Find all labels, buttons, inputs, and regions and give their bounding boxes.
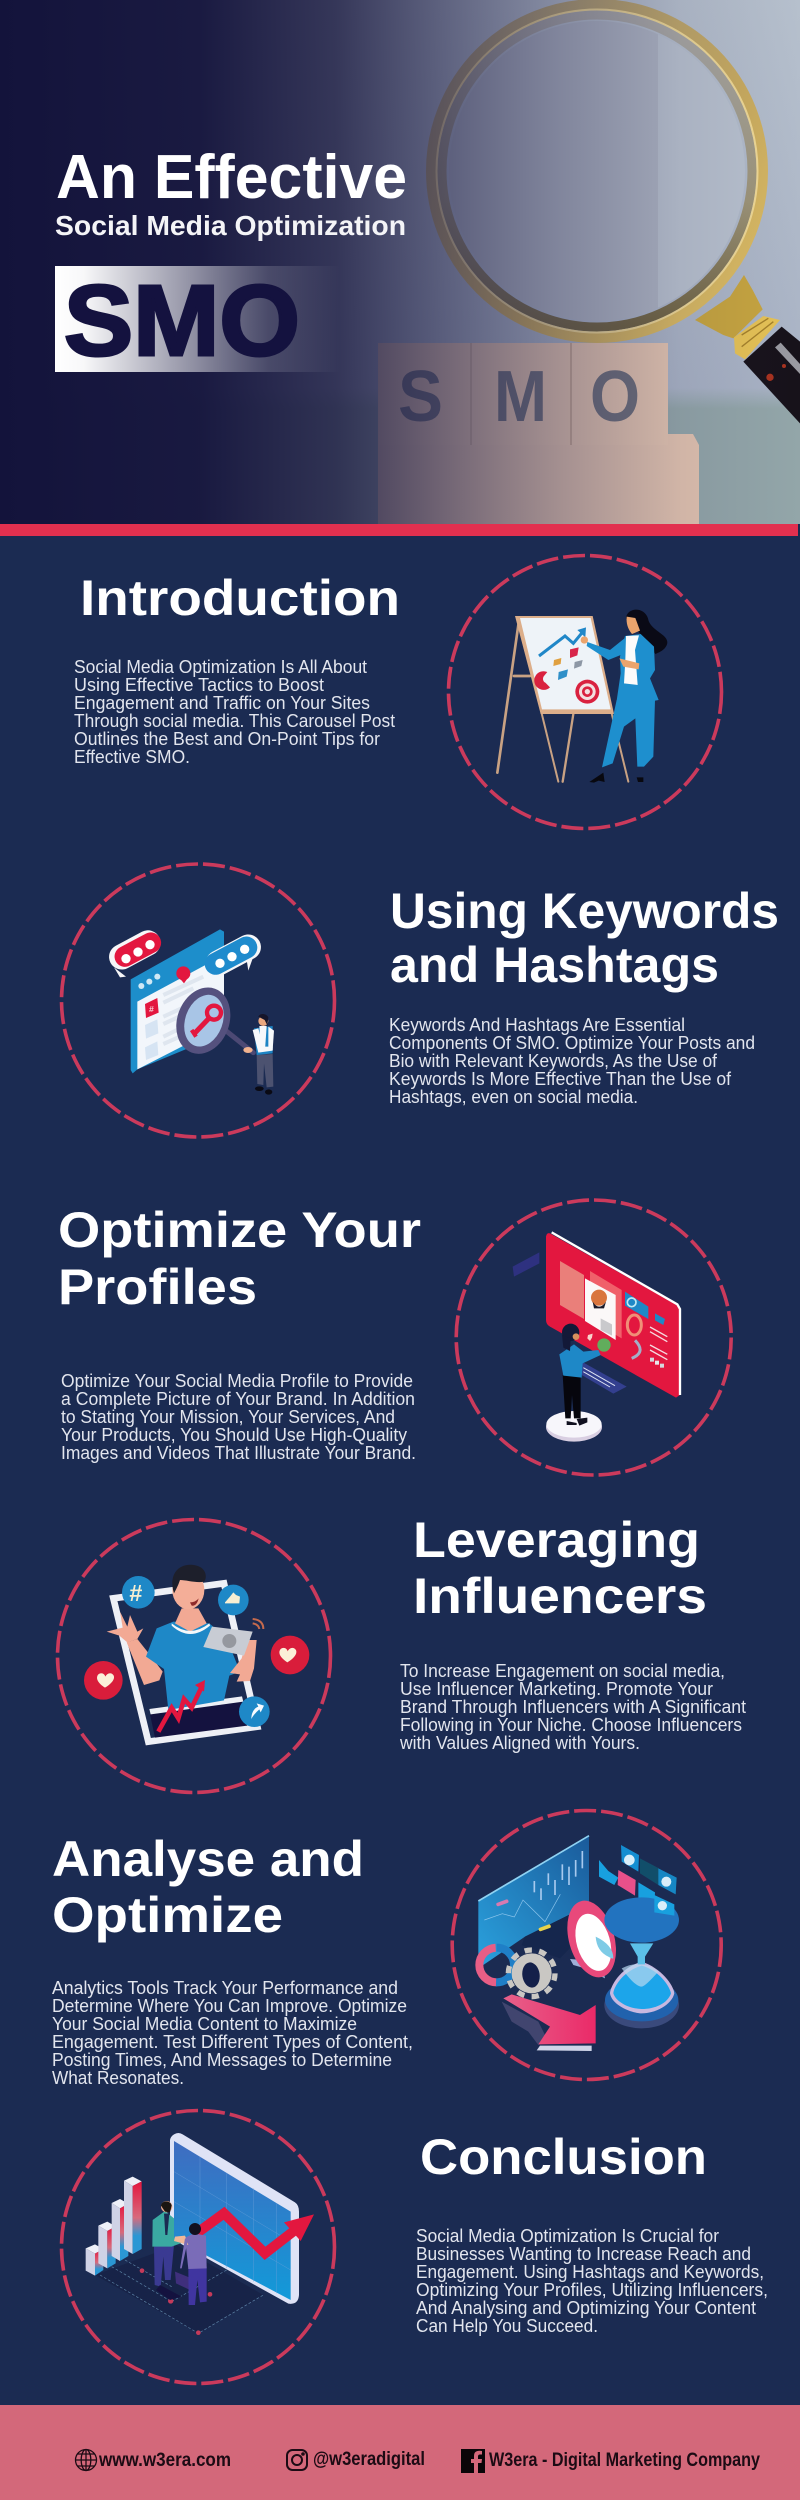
text: conclusion body: Can Help You Succeed.: [416, 2316, 598, 2336]
text: conclusion body: And Analysing and Optimizing Your Content: [416, 2298, 756, 2318]
heading: Optimize Your Profiles: Profiles: [58, 1259, 257, 1315]
heading: Optimize Your Profiles: Optimize Your: [58, 1202, 421, 1258]
panel: optimize your profiles: [58, 1200, 731, 1475]
panel: leveraging influencers: [58, 1512, 746, 1792]
text: introduction body: Through social media. This Carousel Post: [74, 711, 395, 731]
hero photo: magnifier over SMO wooden blocks: S: [398, 357, 443, 437]
text: introduction body: Social Media Optimization Is All About: [74, 657, 367, 677]
title: An Effective: An Effective: [56, 143, 407, 212]
text: influencers body: [399, 1661, 746, 1753]
heading: Analyse and Optimize: Analyse and: [52, 1831, 364, 1887]
panel: conclusion: [62, 2110, 768, 2384]
text: profiles body: Your Products, You Should Use High-Quality: [61, 1425, 407, 1445]
hero banner: [0, 0, 800, 524]
text: introduction body: Using Effective Tactics to Boost: [74, 675, 324, 695]
illustration: dashed circle with influencer in frame: [58, 1520, 330, 1792]
text: keywords body: Bio with Relevant Keywords, As the Use of: [389, 1051, 718, 1071]
illustration: dashed circle with profile screen: [456, 1200, 731, 1475]
heading: Leveraging Influencers: Leveraging: [413, 1512, 700, 1568]
heading: Using Keywords and Hashtags: Using Keywords: [390, 883, 779, 939]
text: analyse body: Engagement. Test Different Types of Content,: [52, 2032, 413, 2052]
text: keywords body: [389, 1015, 755, 1107]
text: keywords body: Hashtags, even on social media.: [389, 1087, 638, 1107]
illustration: dashed circle with analytics, gear and hourglass: [452, 1810, 721, 2080]
panel: introduction: [74, 556, 722, 828]
text: introduction body: Outlines the Best and On-Point Tips for: [74, 729, 380, 749]
panel: analyse and optimize: [52, 1810, 721, 2088]
text: influencers body: Following in Your Niche. Choose Influencers: [400, 1715, 742, 1735]
hero photo: magnifier over SMO wooden blocks: O: [590, 357, 640, 437]
text: conclusion body: Businesses Wanting to Increase Reach and: [416, 2244, 751, 2264]
illustration: dashed circle with browser window and magnifier: #: [149, 1004, 154, 1014]
text: analyse body: Your Social Media Content to Maximize: [52, 2014, 357, 2034]
SMO label box: SMO: [64, 265, 300, 377]
illustration: dashed circle with influencer in frame: #: [129, 1580, 142, 1606]
red divider bar: [0, 524, 798, 536]
text: keywords body: Keywords And Hashtags Are Essential: [389, 1015, 685, 1035]
text: conclusion body: Optimizing Your Profiles, Utilizing Influencers,: [416, 2280, 768, 2300]
heading: Introduction: Introduction: [80, 570, 400, 626]
facebook page text: W3era - Digital Marketing Company: [489, 2450, 760, 2471]
text: influencers body: Brand Through Influencers with A Significant: [400, 1697, 746, 1717]
footer band: [0, 2405, 800, 2500]
text: keywords body: Keywords Is More Effective Than the Use of: [389, 1069, 732, 1089]
text: keywords body: Components Of SMO. Optimize Your Posts and: [389, 1033, 755, 1053]
text: introduction body: Engagement and Traffic on Your Sites: [74, 693, 370, 713]
text: analyse body: Posting Times, And Messages to Determine: [52, 2050, 392, 2070]
text: analyse body: Determine Where You Can Improve. Optimize: [52, 1996, 407, 2016]
instagram handle: @w3eradigital: [313, 2449, 425, 2470]
heading: Using Keywords and Hashtags: and Hashtags: [390, 937, 719, 993]
text: analyse body: Analytics Tools Track Your Performance and: [52, 1978, 398, 1998]
text: conclusion body: Social Media Optimization Is Crucial for: [416, 2226, 719, 2246]
text: influencers body: with Values Aligned with Yours.: [399, 1733, 640, 1753]
text: profiles body: Optimize Your Social Media Profile to Provide: [61, 1371, 413, 1391]
heading: Optimize Your Profiles: [58, 1202, 421, 1315]
hero photo: magnifier over SMO wooden blocks: M: [494, 357, 547, 437]
icon: globe: [76, 2450, 96, 2470]
text: influencers body: To Increase Engagement on social media,: [400, 1661, 725, 1681]
hero photo: magnifier over SMO wooden blocks: [224, 0, 800, 524]
text: analyse body: What Resonates.: [52, 2068, 184, 2088]
text: introduction body: Effective SMO.: [74, 747, 190, 767]
heading: Leveraging Influencers: [413, 1512, 707, 1624]
text: conclusion body: Engagement. Using Hashtags and Keywords,: [416, 2262, 764, 2282]
website text: www.w3era.com: [98, 2450, 231, 2471]
text: profiles body: [61, 1371, 416, 1463]
heading: Using Keywords and Hashtags: [390, 883, 779, 993]
text: profiles body: Images and Videos That Illustrate Your Brand.: [61, 1443, 416, 1463]
heading: Analyse and Optimize: [52, 1831, 364, 1943]
illustration: dashed circle with woman at easel: [448, 556, 722, 828]
illustration: dashed circle with browser window and magnifier: [62, 864, 334, 1137]
illustration: dashed circle with bar charts and two businessmen: [62, 2110, 334, 2384]
heading: Leveraging Influencers: Influencers: [413, 1568, 707, 1624]
icon: instagram: [287, 2450, 307, 2470]
heading: Analyse and Optimize: Optimize: [52, 1887, 283, 1943]
heading: Conclusion: Conclusion: [420, 2129, 707, 2185]
panel: using keywords and hashtags: [62, 864, 779, 1137]
hero dark gradient overlay: [0, 0, 800, 524]
text: profiles body: a Complete Picture of Your Brand. In Addition: [61, 1389, 415, 1409]
subtitle: Social Media Optimization: Social Media Optimization: [55, 210, 406, 241]
text: conclusion body: [416, 2226, 768, 2336]
icon: facebook: [461, 2449, 485, 2473]
text: influencers body: Use Influencer Marketing. Promote Your: [400, 1679, 713, 1699]
text: introduction body: [74, 657, 395, 767]
text: profiles body: to Stating Your Mission, Your Services, And: [61, 1407, 395, 1427]
text: analyse body: [52, 1978, 413, 2088]
